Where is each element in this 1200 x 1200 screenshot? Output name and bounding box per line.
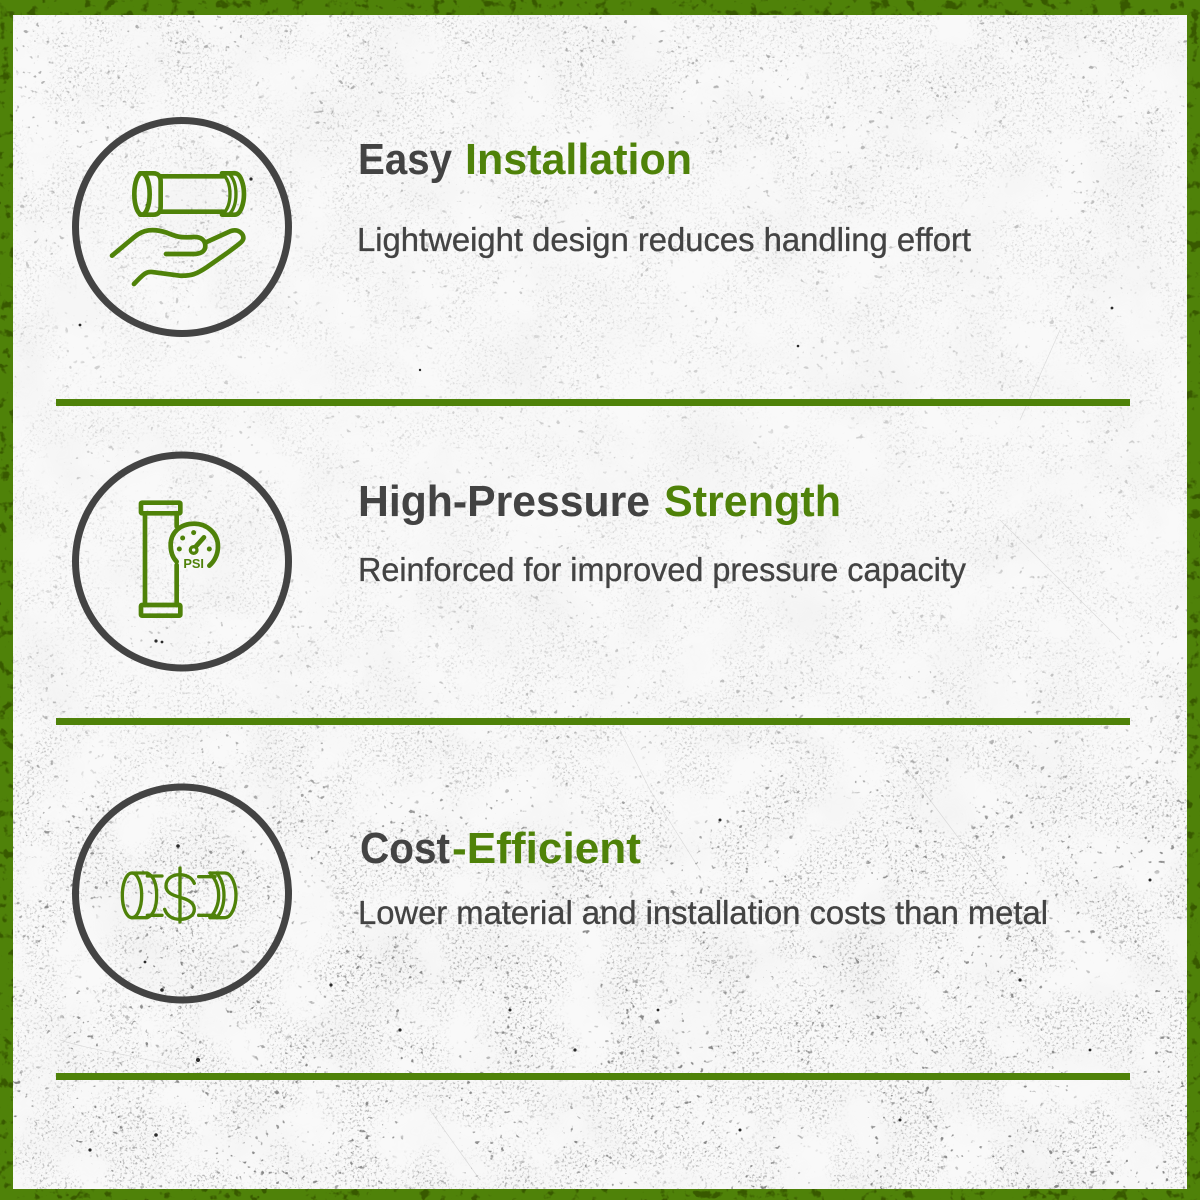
section 3: cost-efficient: -Efficient	[452, 824, 641, 873]
divider	[56, 1073, 1130, 1080]
section 3: cost-efficient	[76, 787, 1048, 1000]
section 1: easy installation: Installation	[465, 135, 692, 184]
icon: pipe with dollar sign	[76, 787, 288, 1000]
section 1: easy installation	[76, 120, 971, 334]
icon: pipe with PSI gauge	[76, 455, 288, 668]
section 2: high-pressure strength: Strength	[664, 477, 841, 526]
description: Reinforced for improved pressure capacity	[358, 551, 966, 588]
icon: pipe with PSI gauge: PSI	[183, 556, 204, 571]
divider	[56, 718, 1130, 725]
description: Lightweight design reduces handling effort	[357, 221, 971, 258]
heading: Easy	[358, 135, 452, 184]
description: Lower material and installation costs than metal	[358, 894, 1048, 931]
icon: pipe on open hand	[76, 120, 288, 334]
divider	[56, 399, 1130, 406]
heading: Cost	[360, 824, 450, 873]
heading: High-Pressure	[358, 477, 650, 526]
section 2: high-pressure strength	[76, 455, 966, 668]
